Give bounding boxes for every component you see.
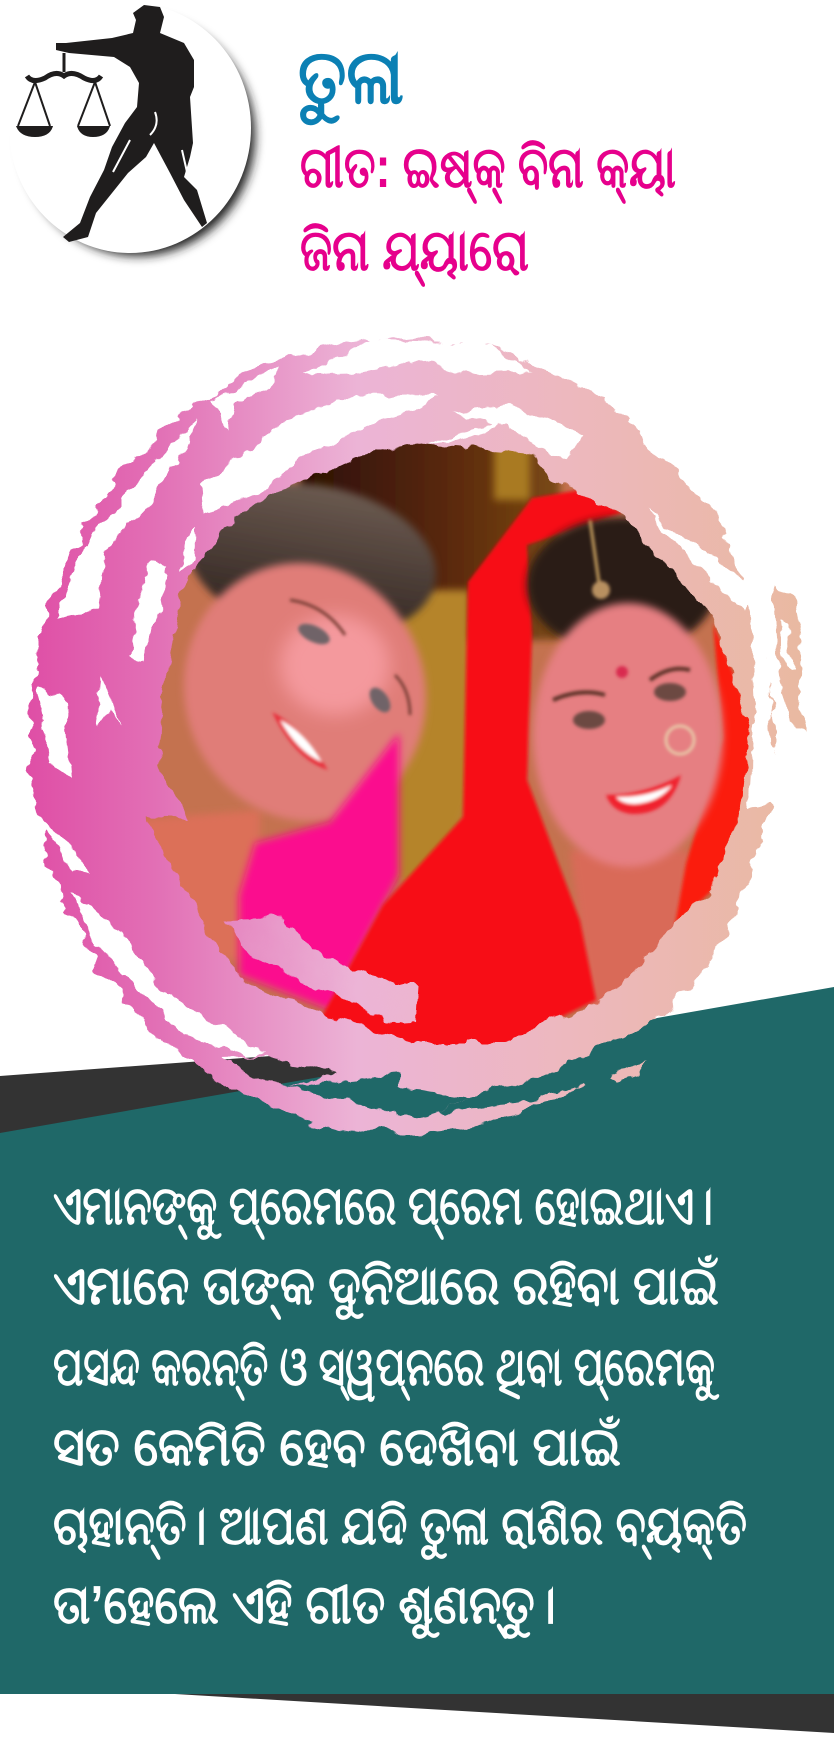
photo: two smiling women (130, 430, 770, 1060)
badge shadow (21, 16, 255, 256)
left woman chest (130, 810, 260, 960)
title: sign name: ତୁଳା (298, 35, 404, 125)
dark band behind teal panel, bottom (175, 1694, 834, 1733)
right woman neck (570, 850, 690, 1010)
red veil and dress (320, 490, 622, 1050)
body text (53, 1176, 747, 1639)
right woman face (533, 603, 723, 867)
right woman hair (527, 517, 717, 653)
brush overlay across lower photo (225, 918, 418, 1024)
dark band behind teal panel, top (0, 1045, 420, 1140)
left woman eyes and smile (272, 600, 410, 770)
icon: libra zodiac badge (9, 3, 255, 256)
gold cloth (395, 585, 470, 883)
body line 2: ଏମାନେ ତାଙ୍କ ଦୁନିଆରେ ରହିବା ପାଇଁ (53, 1253, 719, 1320)
heading: song line two: ଜିନା ଯ୍ୟାରୋ (300, 218, 529, 287)
body line 4: ସତ କେମିତି ହେବ ଦେଖିବା ପାଇଁ (53, 1414, 621, 1477)
left woman face (181, 557, 430, 824)
right woman features (553, 520, 694, 814)
body line 6: ତା’ହେଲେ ଏହି ଗୀତ ଶୁଣନ୍ତୁ। (53, 1575, 556, 1639)
badge circle (9, 3, 251, 253)
man silhouette (56, 5, 207, 242)
panel: teal text panel (0, 987, 834, 1694)
balance scales (16, 53, 110, 137)
heading: song line one: ଗୀତ: ଇଷ୍କ୍ ବିନା କ୍ୟା (300, 135, 676, 204)
brush ring frame (26, 336, 807, 1136)
left woman hair (190, 479, 439, 625)
photo background (146, 480, 749, 1046)
magenta dress (239, 733, 399, 1010)
